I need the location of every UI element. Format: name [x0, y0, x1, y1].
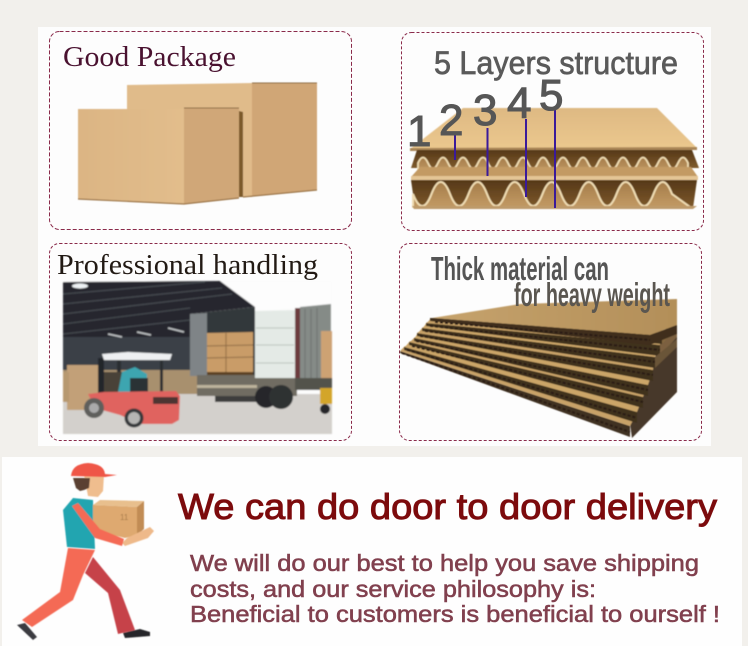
panel: good package [50, 32, 352, 230]
panel: professional handling [50, 244, 352, 440]
heading: professional handling: Professional handling [57, 249, 318, 281]
heading: good package: Good Package [63, 41, 236, 73]
heading: 5 layers structure: 5 Layers structure [434, 45, 678, 81]
layer numbers: 1 [407, 107, 431, 156]
body text: service philosophy: costs, and our service philosophy is: [190, 576, 596, 602]
body text: service philosophy: We will do our best to help you save shipping [190, 550, 699, 576]
layer numbers: 5 [539, 71, 563, 120]
diagram: corrugated cardboard cross-section [410, 108, 699, 209]
layer numbers: 4 [507, 79, 531, 128]
panel: thick material [400, 244, 702, 440]
panel: 5 layers structure [402, 32, 704, 230]
layer numbers: 2 [439, 96, 463, 145]
heading: thick material can: Thick material can [431, 250, 609, 287]
icon: delivery man carrying a box [17, 463, 154, 640]
body text: service philosophy: Beneficial to customers is beneficial to ourself ! [190, 601, 720, 627]
leader lines [455, 110, 555, 208]
heading: door to door delivery: We can do door to door delivery [178, 486, 717, 527]
body text: service philosophy [190, 550, 720, 627]
panel: door to door delivery [17, 463, 720, 640]
layer numbers [407, 71, 563, 156]
icon: delivery man carrying a box: 11 [120, 513, 129, 522]
illustration: stack of corrugated sheets [400, 299, 677, 438]
layer numbers: 3 [473, 86, 497, 135]
photo: forklift loading a truck [63, 281, 332, 434]
illustration: cardboard boxes [78, 83, 317, 204]
